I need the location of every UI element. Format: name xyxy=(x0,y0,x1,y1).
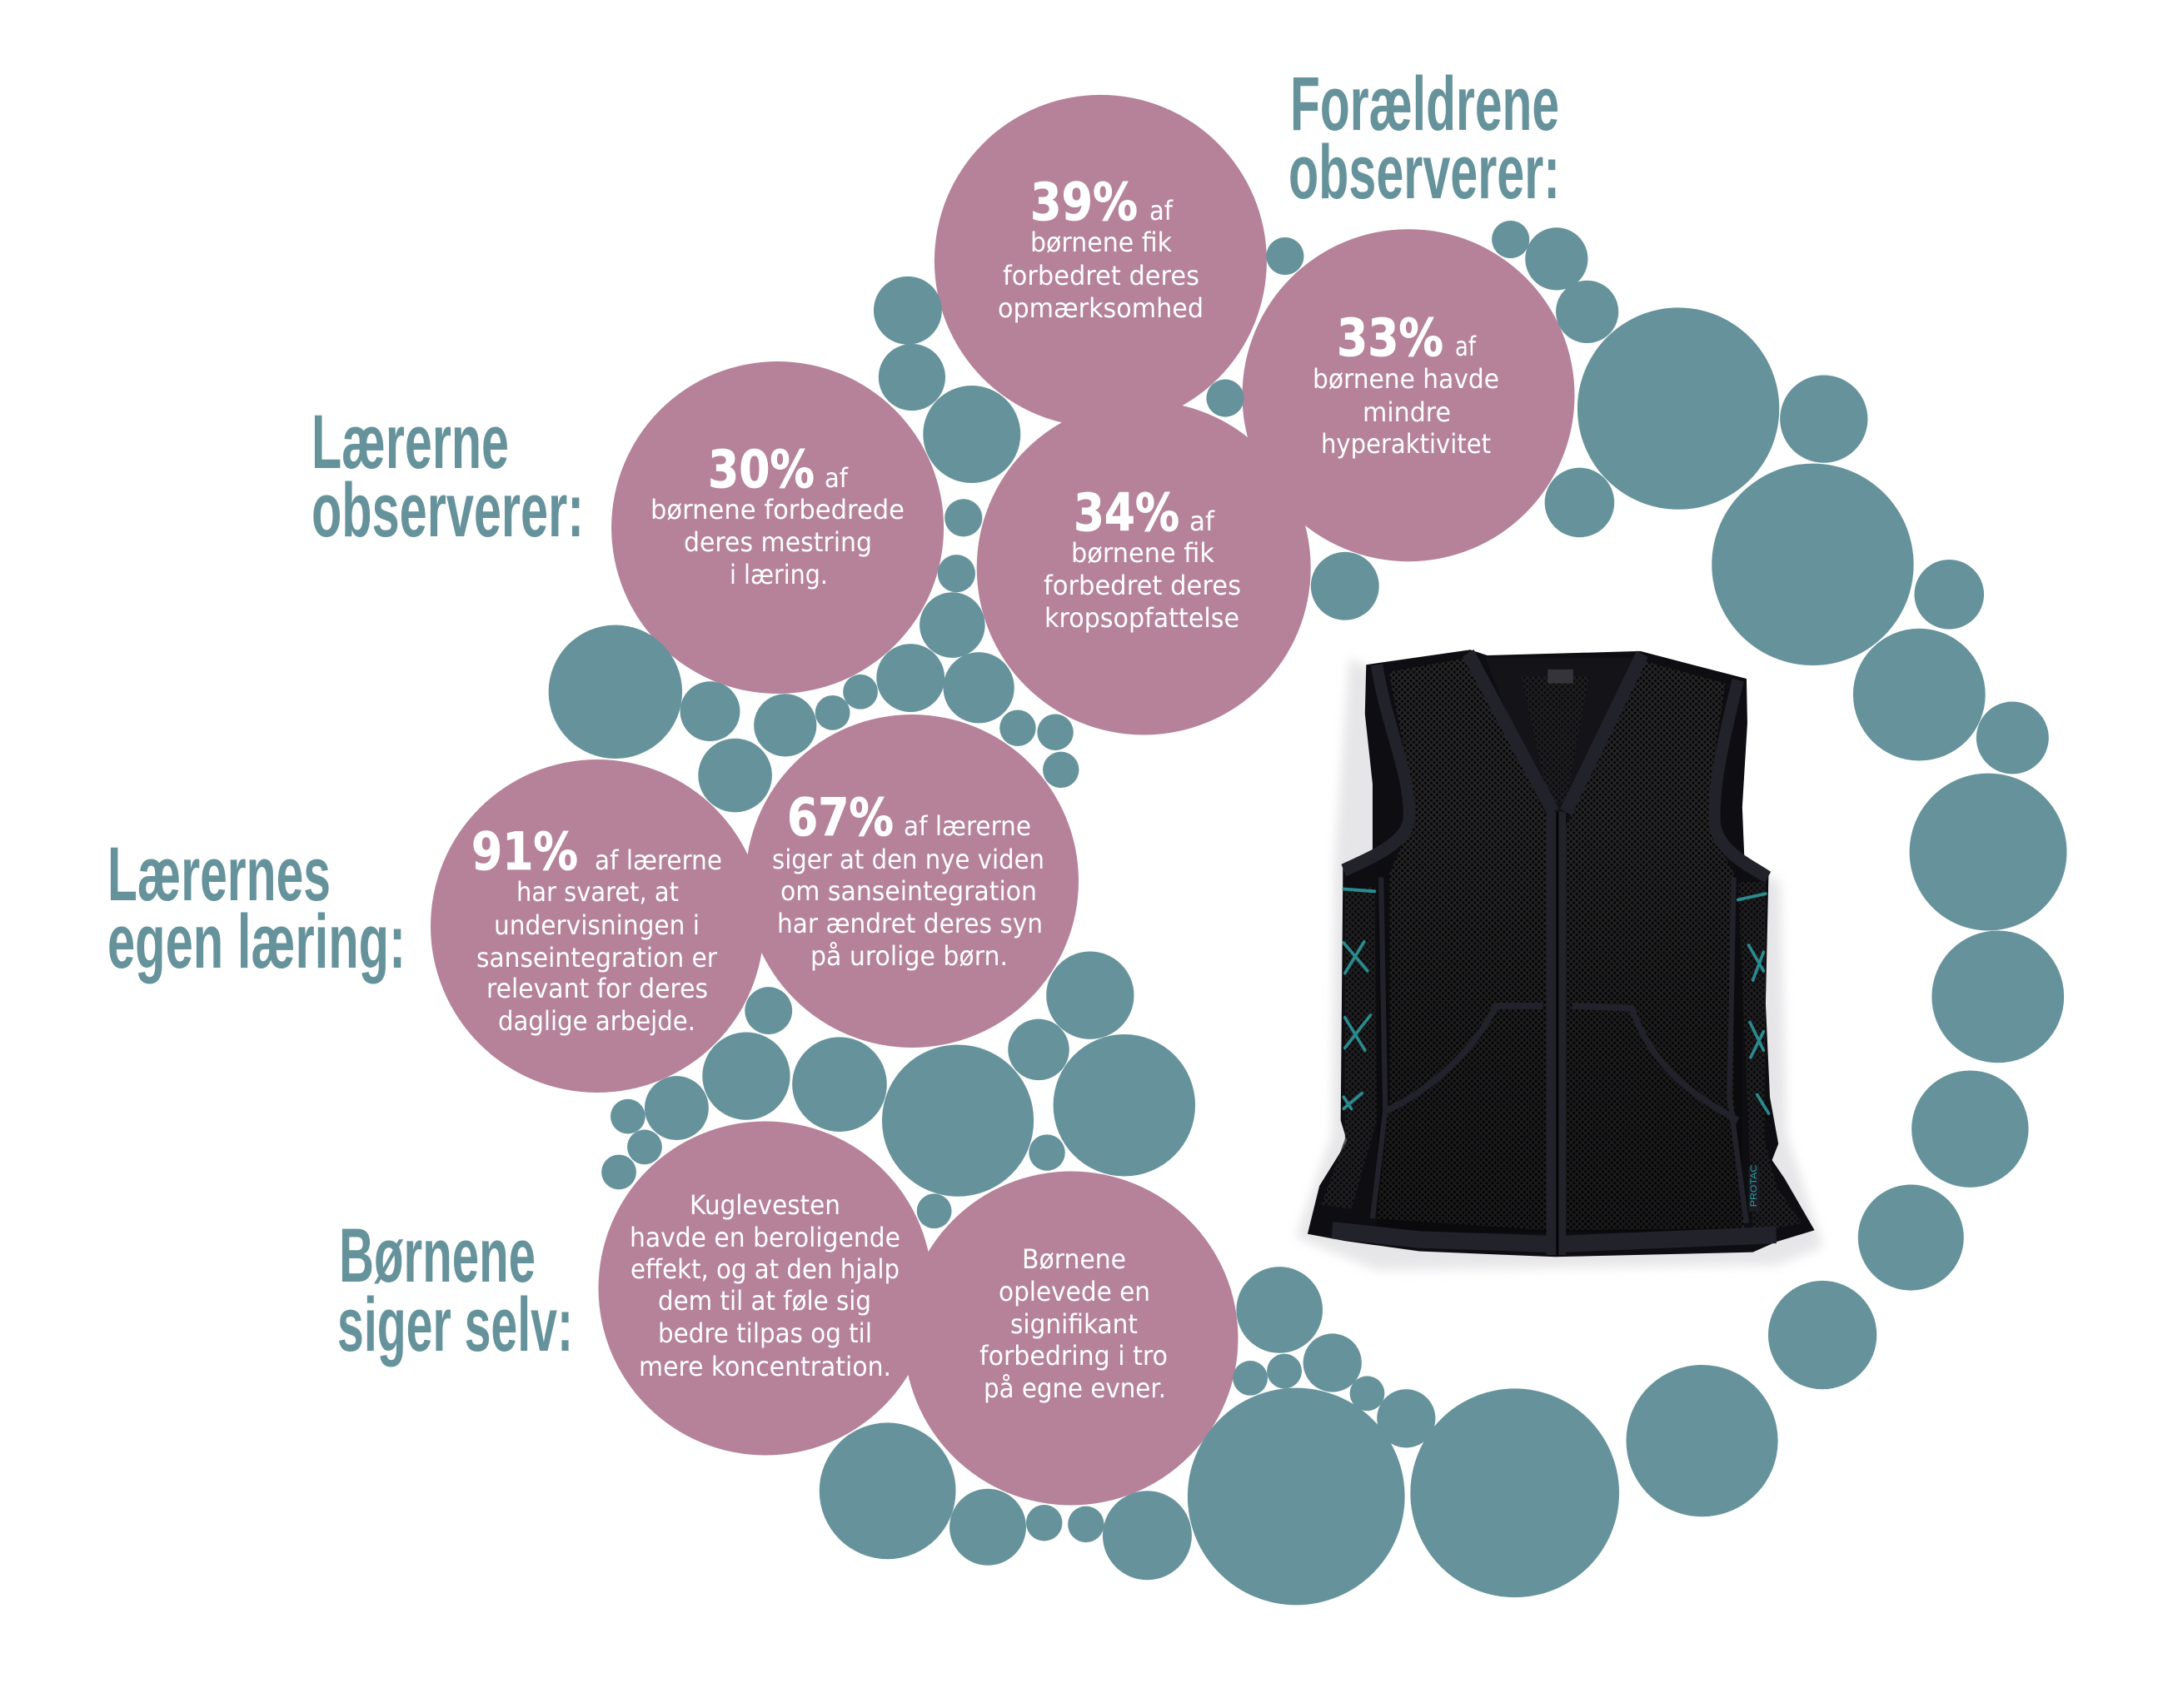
panel: 33% hyperactivity xyxy=(1243,229,1574,561)
panel: 33% hyperactivity: 33% xyxy=(1337,307,1443,368)
panel: 91% teachers: sanseintegration er xyxy=(476,942,718,974)
heading: Børnene siger selv: siger selv: xyxy=(337,1282,573,1367)
panel: 33% hyperactivity: mindre xyxy=(1363,396,1451,428)
panel: children calming effect: dem til at føle sig xyxy=(658,1285,871,1317)
teal bubbles: lower right cluster xyxy=(1233,1267,1435,1447)
panel: 30% mastery in learning: af xyxy=(825,462,849,494)
panel: 67% teachers: af lærerne xyxy=(904,810,1031,842)
panel: 91% teachers: daglige arbejde. xyxy=(498,1005,695,1037)
panel: 67% teachers: på urolige børn. xyxy=(810,940,1008,972)
heading: Lærerne observerer xyxy=(312,400,584,553)
teal bubbles: bottom cluster xyxy=(820,1422,1192,1580)
panel: 34% body awareness: af xyxy=(1189,505,1215,537)
heading: Lærernes egen læring: egen læring: xyxy=(107,899,406,984)
panel: 34% body awareness: 34% xyxy=(1074,482,1179,543)
teal bubbles: middle cluster xyxy=(601,952,1195,1228)
panel: 67% teachers xyxy=(745,715,1079,1048)
heading: Børnene siger selv xyxy=(337,1213,573,1367)
panel: 34% body awareness xyxy=(977,401,1311,734)
panel: 91% teachers: har svaret, at xyxy=(516,876,679,908)
panel: children calming effect: mere koncentration. xyxy=(639,1351,891,1382)
panel: 91% teachers xyxy=(431,759,764,1093)
panel: children self-belief: Børnene xyxy=(1022,1243,1126,1275)
heading: Forældrene observerer xyxy=(1288,62,1560,215)
panel: children calming effect xyxy=(598,1121,933,1456)
panel: 30% mastery in learning: deres mestring xyxy=(684,526,872,558)
panel: 34% body awareness: forbedret deres xyxy=(1044,570,1241,601)
vest photo: PROTAC xyxy=(1750,1165,1759,1207)
heading: Lærerne observerer: Lærerne xyxy=(312,400,509,485)
vest photo xyxy=(1296,650,1823,1270)
panel: 33% hyperactivity: børnene havde xyxy=(1313,363,1499,395)
panel: 67% teachers: 67% xyxy=(787,787,894,848)
teal bubbles: upper cluster xyxy=(549,237,1303,812)
panel: 33% hyperactivity: af xyxy=(1455,331,1477,362)
panel: children self-belief xyxy=(905,1171,1238,1506)
panel: children self-belief: signifikant xyxy=(1010,1308,1138,1340)
panel: 39% attention: 39% xyxy=(1030,172,1138,232)
panel: 34% body awareness: kropsopfattelse xyxy=(1044,602,1239,634)
heading: Forældrene observerer: Forældrene xyxy=(1290,62,1559,147)
panel: 91% teachers: af lærerne xyxy=(595,844,722,876)
panel: 67% teachers: siger at den nye viden xyxy=(772,844,1044,875)
panel: 91% teachers: relevant for deres xyxy=(486,973,708,1004)
panel: children calming effect: effekt, og at den hjalp xyxy=(630,1253,900,1285)
panel: 33% hyperactivity: hyperaktivitet xyxy=(1321,428,1491,460)
panel: 67% teachers: om sanseintegration xyxy=(780,875,1037,907)
panel: 39% attention: opmærksomhed xyxy=(998,292,1204,324)
panel: 91% teachers: undervisningen i xyxy=(494,909,700,941)
panel: children self-belief: forbedring i tro xyxy=(979,1340,1168,1372)
panel: 39% attention xyxy=(935,95,1267,427)
panel: 67% teachers: har ændret deres syn xyxy=(777,908,1043,939)
heading: Lærernes egen læring xyxy=(107,832,406,984)
heading: Forældrene observerer: observerer: xyxy=(1288,130,1560,215)
panel: 39% attention: børnene fik xyxy=(1030,227,1172,258)
heading: Lærernes egen læring: Lærernes xyxy=(107,832,331,917)
heading: Børnene siger selv: Børnene xyxy=(339,1213,536,1298)
panel: 39% attention: forbedret deres xyxy=(1003,260,1199,291)
panel: 30% mastery in learning: i læring. xyxy=(730,559,828,590)
panel: 39% attention: af xyxy=(1149,195,1174,227)
heading: Lærerne observerer: observerer: xyxy=(312,468,584,553)
panel: 34% body awareness: børnene fik xyxy=(1071,537,1214,569)
panel: children self-belief: oplevede en xyxy=(999,1276,1150,1307)
panel: 30% mastery in learning: børnene forbedrede xyxy=(650,494,905,525)
panel: children self-belief: på egne evner. xyxy=(984,1372,1166,1404)
panel: 30% mastery in learning: 30% xyxy=(708,439,815,500)
panel: 30% mastery in learning xyxy=(611,361,944,694)
panel: children calming effect: bedre tilpas og til xyxy=(658,1317,872,1349)
teal bubbles: outer ring xyxy=(1188,221,2066,1605)
panel: children calming effect: havde en beroligende xyxy=(630,1222,900,1253)
panel: 91% teachers: 91% xyxy=(471,821,578,882)
panel: children calming effect: Kuglevesten xyxy=(690,1189,840,1221)
